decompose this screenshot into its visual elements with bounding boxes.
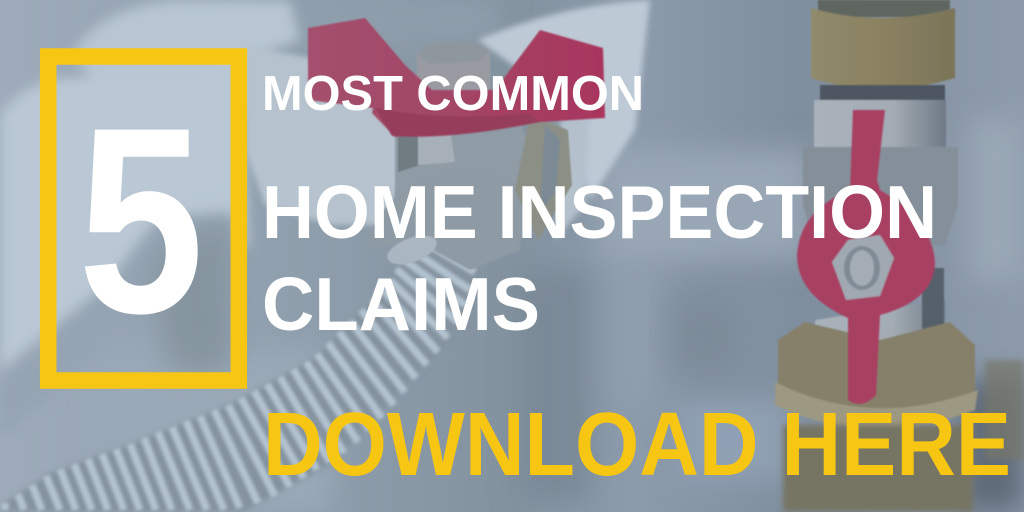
red butterfly handle, left (308, 18, 605, 137)
heading: most common: MOST COMMON (262, 67, 644, 121)
corrugated hose (0, 235, 480, 512)
left valve body (365, 43, 572, 270)
right valve assembly (775, 0, 978, 429)
red handle, right (797, 110, 935, 404)
white pipes (0, 0, 302, 366)
yellow frame (48, 56, 239, 380)
heading: claims: CLAIMS (262, 262, 540, 346)
heading: home inspection: HOME INSPECTION (262, 170, 937, 254)
number 5: 5 (78, 73, 204, 369)
